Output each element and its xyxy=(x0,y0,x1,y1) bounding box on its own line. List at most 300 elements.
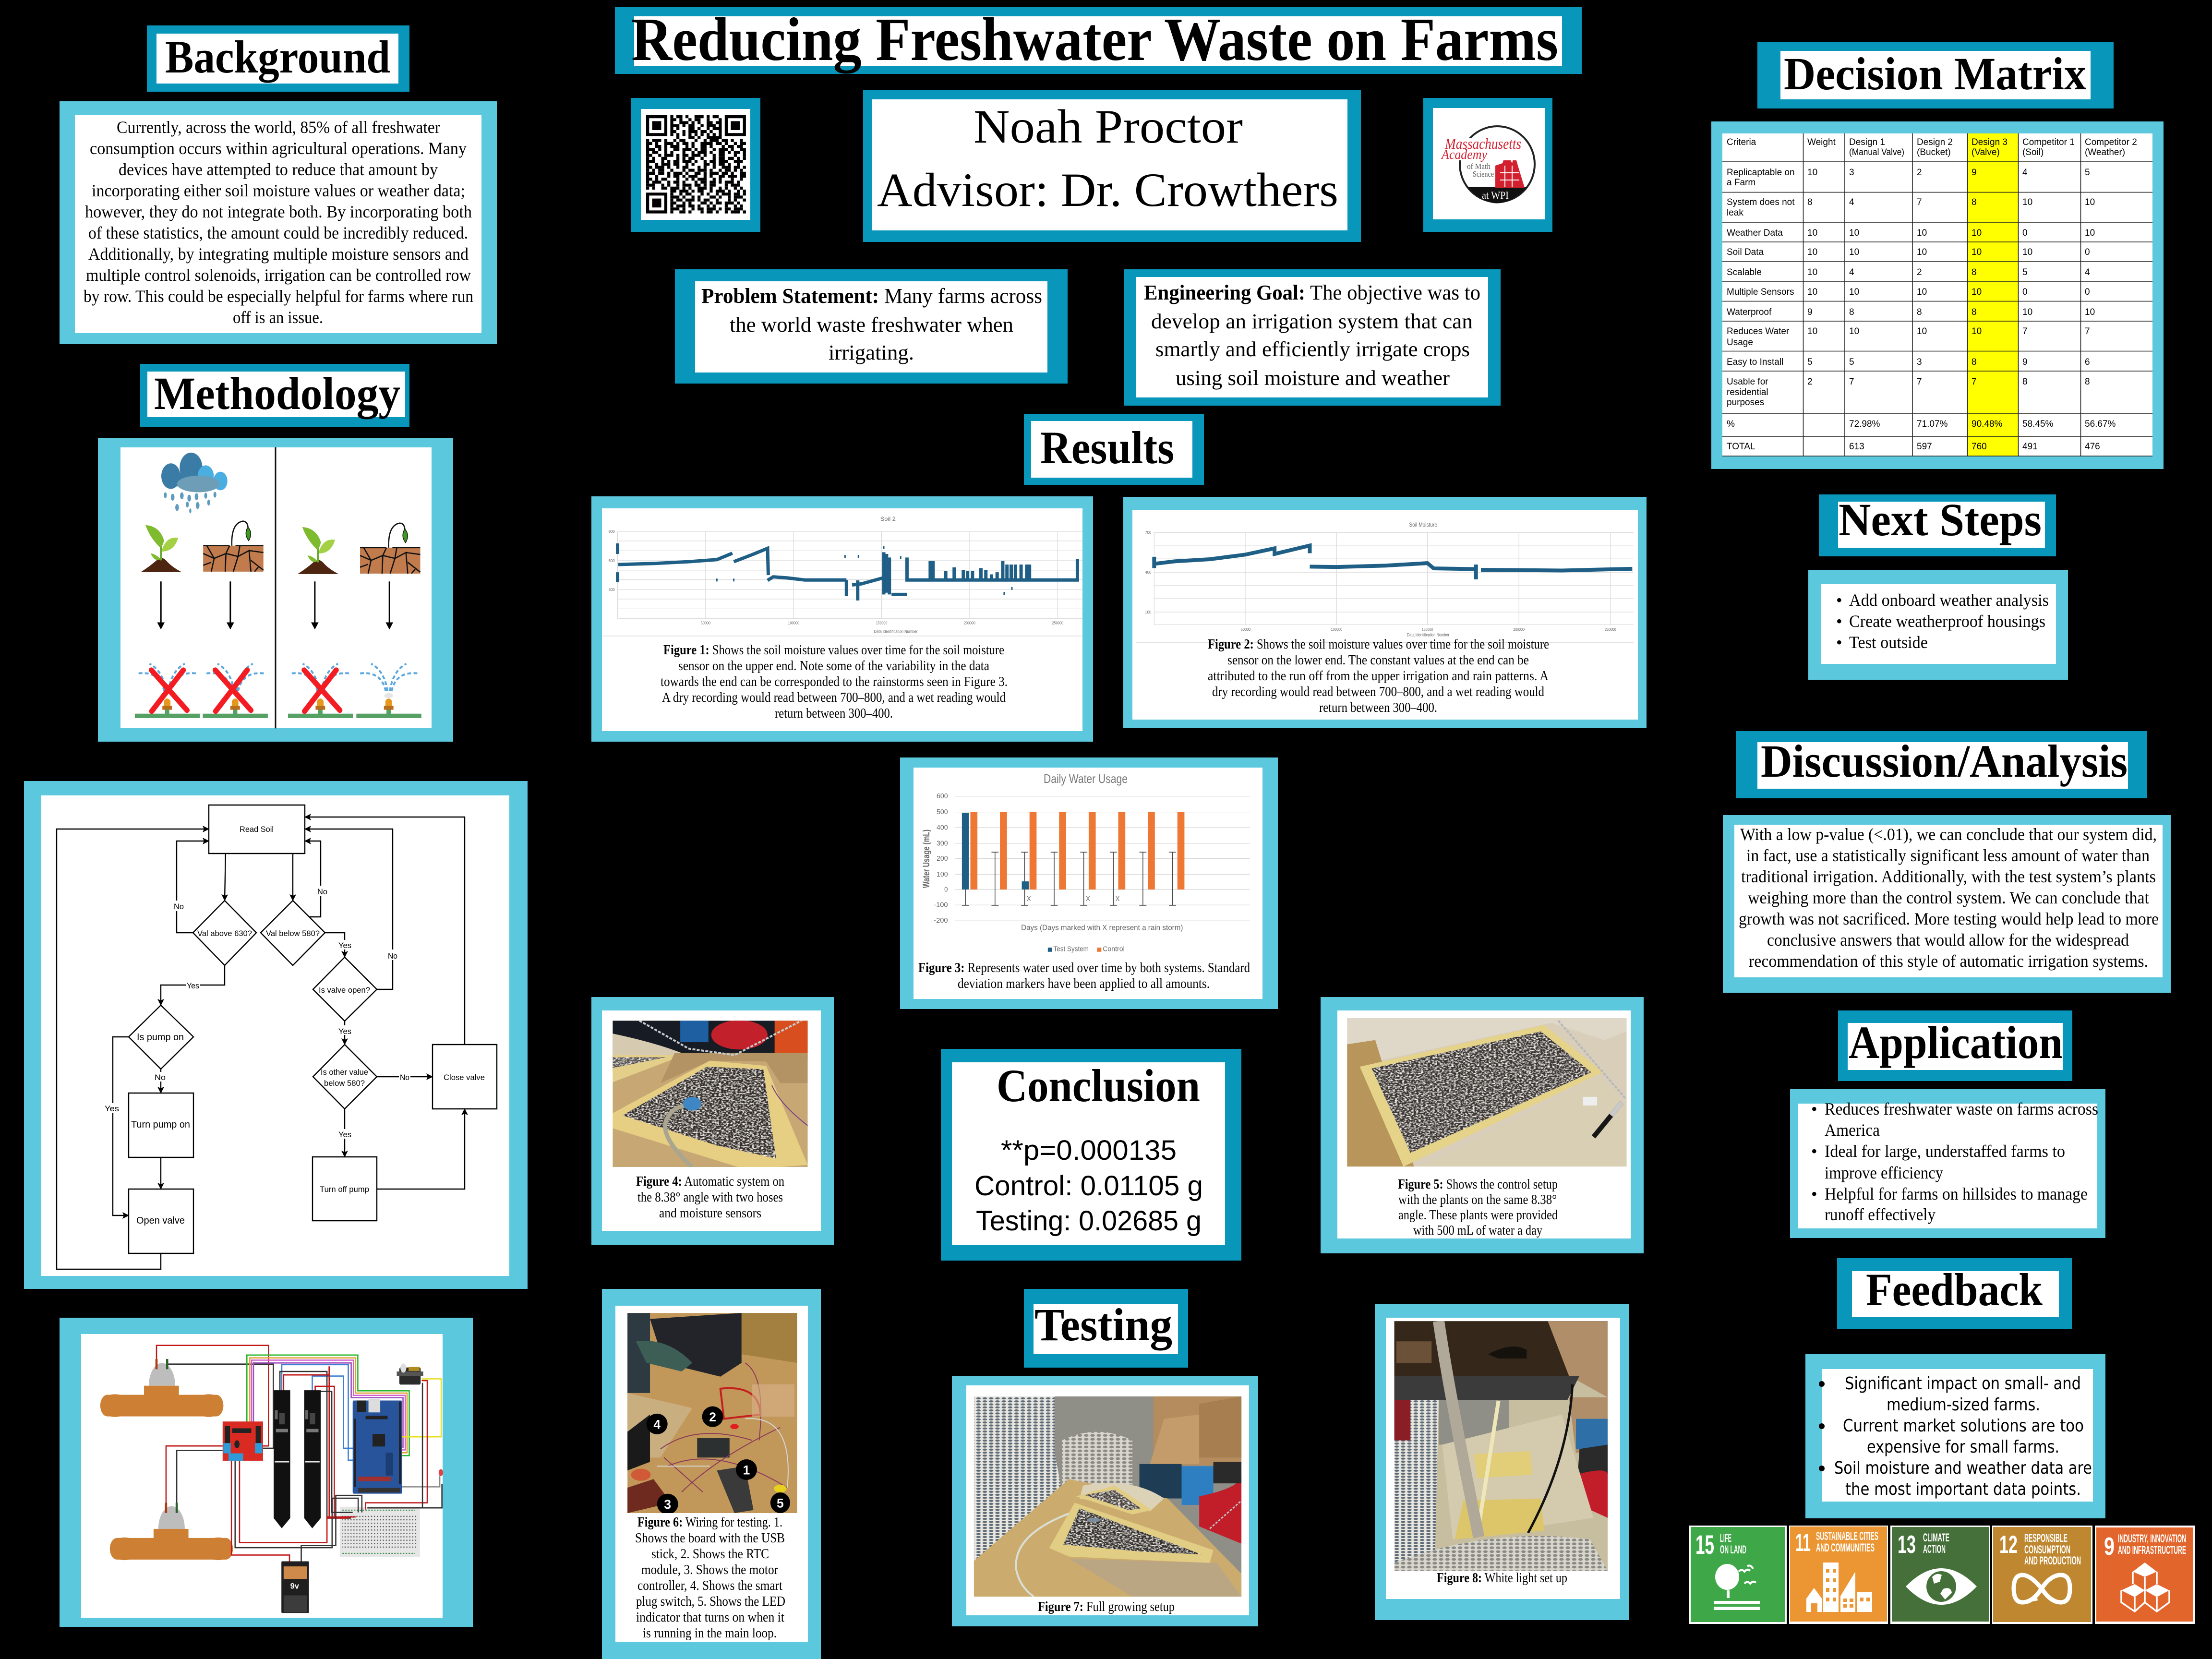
heading: Discussion/Analysis: Discussion/Analysis xyxy=(1761,735,2128,787)
table rows: 9 xyxy=(2022,357,2028,367)
caption: figure 6: Figure 6: Wiring for testing. 1. xyxy=(637,1515,782,1530)
panel: background text: however, they do not integrate both. By incorporating both xyxy=(85,202,472,221)
caption: figure 6: indicator that turns on when it xyxy=(636,1610,784,1625)
panel: conclusion: **p=0.000135 xyxy=(1001,1135,1177,1166)
table header row: (Bucket) xyxy=(1917,147,1951,157)
SDG 15 life on land: 15 xyxy=(1695,1529,1714,1560)
panel: application list: Reduces freshwater waste on farms across xyxy=(1825,1099,2098,1118)
table header row: (Manual Valve) xyxy=(1849,147,1904,157)
panel: figure 3 xyxy=(900,757,1278,1009)
axis labels: 200000 xyxy=(964,621,975,625)
caption: figure 6: controller, 4. Shows the smart xyxy=(637,1578,782,1593)
icons: red crosses xyxy=(151,670,340,711)
chart: daily water usage: Days (Days marked with X represent a rain storm) xyxy=(1021,923,1183,932)
panel: feedback list xyxy=(1805,1354,2105,1518)
caption: figure 6: stick, 2. Shows the RTC xyxy=(651,1547,769,1562)
table rows: 10 xyxy=(1917,228,1927,238)
table rows: 4 xyxy=(1849,267,1854,277)
flowchart text: Yes xyxy=(338,941,351,950)
flowchart text: No xyxy=(155,1073,166,1082)
caption: figure 4: the 8.38° angle with two hoses xyxy=(637,1190,783,1205)
axis labels: Soil 2 xyxy=(880,516,896,522)
heading: Decision Matrix xyxy=(1757,42,2114,108)
engineering goal xyxy=(1124,269,1501,406)
axis labels xyxy=(1145,521,1616,637)
caption: figure 1: sensor on the upper end. Note some of the variability in the data xyxy=(678,659,990,673)
caption: figure 5 xyxy=(1398,1177,1558,1238)
flowchart text: Read Soil xyxy=(240,825,274,834)
panel: feedback list: Soil moisture and weather data are xyxy=(1834,1458,2092,1478)
engineering goal: develop an irrigation system that can xyxy=(1151,310,1473,333)
table rows: 10 xyxy=(2022,247,2032,257)
panel: background text: devices have attempted to reduce that amount by xyxy=(119,160,438,179)
heading: Results: Results xyxy=(1040,422,1174,473)
flowchart text: Turn pump on xyxy=(131,1119,190,1130)
axis labels: 400 xyxy=(1145,570,1151,575)
table rows: 5 xyxy=(1807,357,1813,367)
axis tick labels: -200 xyxy=(934,916,948,924)
chart: soil 2 scatter: 250000 xyxy=(1052,621,1063,625)
axis tick labels: X xyxy=(1027,895,1031,902)
table rows: Reduces Water xyxy=(1727,326,1790,337)
flowchart text: Is valve open? xyxy=(319,986,370,995)
axis tick labels: 0 xyxy=(944,885,948,893)
caption: figure 3 xyxy=(918,961,1250,991)
chart: soil 2 scatter xyxy=(602,516,1082,636)
icon: dry cracked soil, right xyxy=(360,523,421,574)
flowchart text: Is other value xyxy=(321,1068,368,1077)
heading: Decision Matrix: Decision Matrix xyxy=(1784,48,2086,99)
flowchart text: No xyxy=(317,887,327,896)
table rows: 10 xyxy=(1807,228,1817,238)
numbered markers: 1 xyxy=(743,1463,750,1477)
battery xyxy=(281,1561,309,1613)
SDG 13 climate action: 13 xyxy=(1898,1531,1916,1559)
caption: figure 1: A dry recording would read between 700–800, and a wet reading would xyxy=(662,690,1006,705)
table rows: 10 xyxy=(1972,228,1982,238)
table rows: 476 xyxy=(2085,442,2100,452)
school logo: Massachusetts xyxy=(1444,135,1521,152)
table rows: 0 xyxy=(2085,247,2090,257)
panel: application list: • xyxy=(1811,1142,1817,1161)
caption: figure 6: is running in the main loop. xyxy=(643,1626,777,1641)
table rows: 7 xyxy=(1972,377,1977,387)
legend: Test System xyxy=(1054,945,1089,952)
SDG icons row xyxy=(1689,1526,2195,1624)
table rows: a Farm xyxy=(1727,178,1755,188)
chart: soil moisture scatter xyxy=(1136,521,1634,643)
table rows: Scalable xyxy=(1727,267,1762,277)
caption: figure 1: towards the end can be corresponded to the rainstorms seen in Figure 3. xyxy=(661,674,1008,689)
chart: daily water usage: Daily Water Usage xyxy=(1044,771,1128,786)
table rows: 10 xyxy=(2085,197,2095,207)
caption: figure 5: with 500 mL of water a day xyxy=(1413,1223,1542,1238)
LED xyxy=(439,1469,443,1476)
panel: conclusion xyxy=(941,1049,1241,1261)
panel: application list xyxy=(1790,1089,2105,1238)
table header row xyxy=(1727,137,2137,157)
photo: control tray xyxy=(1347,1018,1627,1166)
table rows: Easy to Install xyxy=(1727,357,1783,367)
caption: figure 1: Figure 1: Shows the soil moisture values over time for the soil moisture xyxy=(663,643,1004,658)
table rows: 7 xyxy=(2022,326,2028,337)
axis labels: Data Identification Number xyxy=(874,629,917,634)
numbered markers: 5 xyxy=(777,1496,784,1510)
axis tick labels: X xyxy=(1116,895,1119,902)
SDG 15 life on land xyxy=(1689,1526,1787,1624)
axis labels: 150000 xyxy=(876,621,887,625)
flowchart edge label backgrounds xyxy=(104,886,410,1139)
heading: Background: Background xyxy=(165,31,390,83)
table rows: 10 xyxy=(1807,247,1817,257)
SDG 11 sustainable cities: SUSTAINABLE CITIES xyxy=(1816,1530,1878,1543)
heading: Testing: Testing xyxy=(1034,1299,1172,1350)
SDG 12 responsible consumption: RESPONSIBLE xyxy=(2024,1532,2068,1545)
icons: sprinklers xyxy=(135,664,421,718)
SDG 12 responsible consumption: AND PRODUCTION xyxy=(2024,1554,2081,1567)
chart: daily water usage: Water Usage (mL) xyxy=(922,830,932,888)
axis labels: 600 xyxy=(608,558,615,563)
flowchart text: Val below 580? xyxy=(266,929,320,938)
axis labels: Data Identification Number xyxy=(1407,632,1449,637)
flowchart text: No xyxy=(174,902,184,911)
table rows: 491 xyxy=(2022,442,2038,452)
table rows: 5 xyxy=(1849,357,1854,367)
soil moisture probes xyxy=(274,1390,290,1528)
highlighted column xyxy=(1967,133,2018,456)
SDG 13 climate action: ACTION xyxy=(1923,1543,1946,1556)
engineering goal: using soil moisture and weather xyxy=(1176,366,1450,390)
heading: Application xyxy=(1838,1010,2072,1081)
table rows: 8 xyxy=(1917,307,1922,317)
table rows: 613 xyxy=(1849,442,1864,452)
axis tick labels: 100 xyxy=(937,870,948,878)
axis labels: 150000 xyxy=(1422,627,1433,632)
panel: background text: consumption occurs within agricultural operations. Many xyxy=(90,139,467,158)
table rows: 3 xyxy=(1917,357,1922,367)
arrows down xyxy=(158,581,392,628)
axis tick labels: 500 xyxy=(937,808,948,816)
table rows: 71.07% xyxy=(1917,419,1948,429)
table rows: Soil Data xyxy=(1727,247,1764,257)
table rows: 10 xyxy=(1917,247,1927,257)
table rows: Waterproof xyxy=(1727,307,1772,317)
table rows: 4 xyxy=(1849,197,1854,207)
motor controller xyxy=(223,1421,263,1461)
axis labels: 100000 xyxy=(788,621,799,625)
error bars xyxy=(962,852,1176,905)
axis labels: 700 xyxy=(1145,530,1151,535)
flowchart text xyxy=(105,825,485,1226)
table rows: 10 xyxy=(2022,307,2032,317)
table rows: 760 xyxy=(1972,442,1987,452)
test system bars xyxy=(962,813,1029,890)
table rows: Usable for xyxy=(1727,377,1768,387)
panel: discussion text xyxy=(1723,815,2171,993)
table rows: 10 xyxy=(1849,326,1859,337)
table header row: Competitor 2 xyxy=(2085,137,2137,147)
table rows: leak xyxy=(1727,208,1743,218)
breadboard xyxy=(340,1507,420,1557)
axis tick labels: -100 xyxy=(934,901,948,909)
control bars xyxy=(970,812,1184,890)
table rows: 9 xyxy=(1972,168,1977,178)
flowchart text: Turn off pump xyxy=(320,1185,369,1194)
SDG 11 sustainable cities: AND COMMUNITIES xyxy=(1816,1541,1875,1554)
panel: conclusion: Conclusion xyxy=(997,1060,1200,1111)
heading: Feedback xyxy=(1837,1258,2072,1329)
caption: figure 2: dry recording would read between 700–800, and a wet reading would xyxy=(1212,685,1544,699)
author block: Advisor: Dr. Crowthers xyxy=(877,163,1338,216)
author block xyxy=(863,90,1361,242)
table rows: 0 xyxy=(2022,287,2028,297)
panel: next steps list: Add onboard weather analysis xyxy=(1849,590,2049,610)
table rows: 597 xyxy=(1917,442,1932,452)
caption: figure 3: deviation markers have been applied to all amounts. xyxy=(958,976,1210,991)
SDG 9 industry and innovation: 9 xyxy=(2104,1533,2115,1561)
wires xyxy=(156,1346,442,1561)
panel: figure 6 xyxy=(602,1289,821,1659)
flowchart text: Yes xyxy=(187,981,199,990)
panel: background text: Currently, across the world, 85% of all freshwater xyxy=(117,118,440,137)
table header row: (Weather) xyxy=(2085,147,2125,157)
caption: figure 1 xyxy=(661,643,1008,721)
axis tick labels: 300 xyxy=(937,839,948,847)
SDG 11 sustainable cities xyxy=(1789,1526,1888,1624)
panel: application list: • xyxy=(1811,1184,1817,1203)
table rows: 4 xyxy=(2085,267,2090,277)
panel: next steps list xyxy=(1808,570,2068,680)
caption: figure 4: and moisture sensors xyxy=(659,1206,761,1221)
icon: healthy plant (rain side) xyxy=(141,525,182,572)
heading: Results xyxy=(1024,414,1204,485)
panel: application list: improve efficiency xyxy=(1825,1163,1943,1182)
problem statement xyxy=(675,269,1068,384)
table header row: (Valve) xyxy=(1972,147,2000,157)
table rows: 10 xyxy=(1807,287,1817,297)
caption: figure 6: module, 3. Shows the motor xyxy=(641,1563,779,1577)
engineering goal: Engineering Goal: The objective was to xyxy=(1144,281,1480,304)
panel: conclusion: Testing: 0.02685 g xyxy=(976,1205,1202,1237)
table rows: % xyxy=(1727,419,1735,429)
SDG 12 responsible consumption: CONSUMPTION xyxy=(2024,1543,2070,1556)
table rows: 8 xyxy=(1972,307,1977,317)
table rows: Multiple Sensors xyxy=(1727,287,1794,297)
title: Reducing Freshwater Waste on Farms xyxy=(631,5,1558,73)
axis labels: 300 xyxy=(608,587,615,592)
chart: daily water usage xyxy=(922,771,1250,952)
panel: figure 1 xyxy=(591,496,1093,742)
caption: figure 2: return between 300–400. xyxy=(1319,700,1437,715)
table rows: 10 xyxy=(1972,287,1982,297)
photo: wiring for testing xyxy=(627,1313,797,1515)
panel: discussion text: recommendation of this style of automatic irrigation systems. xyxy=(1749,951,2148,971)
panel: application list: • xyxy=(1811,1099,1817,1118)
numbered markers xyxy=(647,1407,790,1515)
flowchart text: Close valve xyxy=(444,1073,485,1082)
flowchart text: Open valve xyxy=(136,1215,185,1226)
table rows: 3 xyxy=(1849,168,1854,178)
table rows: Replicaptable on xyxy=(1727,168,1795,178)
caption: figure 2: attributed to the run off from the upper irrigation and rain patterns. A xyxy=(1208,669,1549,684)
panel: methodology diagram xyxy=(98,438,453,742)
flowchart text: No xyxy=(400,1073,409,1082)
panel: discussion text: conclusive answers that would allow for the widespread xyxy=(1767,930,2129,950)
school logo: Academy xyxy=(1441,147,1488,162)
wire terminals xyxy=(156,1359,178,1513)
icon: healthy plant xyxy=(298,527,339,574)
caption: figure 6 xyxy=(635,1515,785,1641)
caption: figure 4: Figure 4: Automatic system on xyxy=(636,1174,784,1189)
SDG 13 climate action xyxy=(1890,1526,1990,1624)
panel: application list: Helpful for farms on hillsides to manage xyxy=(1825,1184,2088,1203)
engineering goal: smartly and efficiently irrigate crops xyxy=(1155,337,1470,361)
table rows: 2 xyxy=(1807,377,1813,387)
problem statement: the world waste freshwater when xyxy=(730,313,1013,337)
table rows: 10 xyxy=(1917,287,1927,297)
numbered markers: 4 xyxy=(653,1417,661,1431)
icon: dry cracked soil xyxy=(203,521,264,572)
table rows xyxy=(1727,168,2116,452)
heading: Application: Application xyxy=(1849,1017,2063,1068)
flowchart text: Val above 630? xyxy=(197,929,252,938)
flowchart text: No xyxy=(388,951,397,961)
caption: figure 1: return between 300–400. xyxy=(775,706,893,721)
arduino board xyxy=(353,1399,402,1494)
panel: feedback list: Significant impact on small- and xyxy=(1845,1374,2081,1394)
axis labels: 50000 xyxy=(1241,627,1250,632)
table rows: 8 xyxy=(1972,197,1977,207)
table header row: Design 3 xyxy=(1972,137,2008,147)
panel: application list: Ideal for large, understaffed farms to xyxy=(1825,1142,2065,1161)
panel: background text: of these statistics, the amount could be incredibly reduced. xyxy=(88,223,468,242)
caption: figure 5: with the plants on the same 8.38° xyxy=(1398,1192,1557,1207)
axis labels: 100000 xyxy=(1331,627,1342,632)
table rows: 7 xyxy=(1849,377,1854,387)
photo: white light setup xyxy=(1393,1321,1608,1571)
table rows: 10 xyxy=(1807,168,1817,178)
table header row: (Soil) xyxy=(2022,147,2044,157)
flowchart text: below 580? xyxy=(324,1079,365,1088)
SDG 11 sustainable cities: 11 xyxy=(1795,1529,1811,1557)
pumps xyxy=(100,1363,233,1560)
panel: background text: off is an issue. xyxy=(233,308,323,327)
caption: figure 2: sensor on the lower end. The constant values at the end can be xyxy=(1227,653,1529,668)
panel: figure 4 xyxy=(591,997,834,1245)
panel: background text: by row. This could be especially helpful for farms where run xyxy=(84,287,473,306)
school logo: Science xyxy=(1473,169,1494,179)
table rows: 7 xyxy=(1917,377,1922,387)
caption: figure 7: Figure 7: Full growing setup xyxy=(1038,1599,1175,1614)
panel: feedback list: expensive for small farms. xyxy=(1867,1437,2059,1457)
flowchart text: Yes xyxy=(338,1027,351,1036)
axis labels xyxy=(608,516,1063,634)
panel: flowchart xyxy=(24,781,528,1289)
table header row: Criteria xyxy=(1727,137,1756,147)
table rows: 10 xyxy=(1917,326,1927,337)
table rows: 10 xyxy=(1807,267,1817,277)
school logo: at WPI xyxy=(1482,189,1509,201)
table rows: 10 xyxy=(1972,247,1982,257)
panel: figure 2 xyxy=(1123,497,1647,728)
table rows: 2 xyxy=(1917,168,1922,178)
table rows: 72.98% xyxy=(1849,419,1880,429)
servo xyxy=(397,1364,423,1384)
table rows: 0 xyxy=(2022,228,2028,238)
axis tick labels: X xyxy=(1086,895,1090,902)
caption: figure 4 xyxy=(636,1174,784,1221)
table rows: 10 xyxy=(1807,326,1817,337)
SDG 12 responsible consumption: 12 xyxy=(1999,1531,2018,1559)
panel: figure 5 xyxy=(1321,997,1644,1253)
panel: wiring diagram xyxy=(60,1318,473,1627)
table rows: 10 xyxy=(1849,228,1859,238)
caption: figure 3: Figure 3: Represents water used over time by both systems. Standard xyxy=(918,961,1250,975)
axis tick labels: 600 xyxy=(937,792,948,800)
table rows: Weather Data xyxy=(1727,228,1783,238)
flowchart text: Yes xyxy=(338,1130,351,1139)
table rows: 10 xyxy=(2022,197,2032,207)
panel: feedback list: Current market solutions are too xyxy=(1843,1416,2084,1436)
heading: Feedback: Feedback xyxy=(1866,1264,2043,1315)
table rows: System does not xyxy=(1727,197,1795,207)
axis labels: Soil Moisture xyxy=(1409,521,1437,528)
table rows: 5 xyxy=(2022,267,2028,277)
table rows: 9 xyxy=(1807,307,1813,317)
flowchart text: Yes xyxy=(105,1104,119,1113)
axis tick labels xyxy=(934,792,1183,932)
battery: 9v xyxy=(290,1581,299,1590)
table rows: Usage xyxy=(1727,337,1753,348)
panel: next steps list: Test outside xyxy=(1849,633,1928,652)
photo: full growing setup xyxy=(974,1396,1241,1597)
panel: next steps list: Create weatherproof housings xyxy=(1849,612,2045,631)
panel: application list: America xyxy=(1825,1120,1880,1140)
table header row: Competitor 1 xyxy=(2022,137,2075,147)
table header row: Weight xyxy=(1807,137,1836,147)
table rows: 5 xyxy=(2085,168,2090,178)
panel: background text: multiple control solenoids, irrigation can be controlled row xyxy=(86,265,471,285)
QR code xyxy=(631,98,760,232)
flowchart text: Is pump on xyxy=(137,1032,184,1043)
problem statement: irrigating. xyxy=(829,341,914,364)
caption: figure 6: Shows the board with the USB xyxy=(635,1531,785,1546)
table rows: 10 xyxy=(1849,247,1859,257)
panel: feedback list: the most important data points. xyxy=(1845,1479,2081,1499)
problem statement: Problem Statement: Many farms across xyxy=(701,284,1042,308)
axis labels: 100 xyxy=(1145,610,1151,614)
panel: conclusion: Control: 0.01105 g xyxy=(974,1170,1203,1202)
panel: discussion text: growth was not sacrificed. More testing would help lead to more xyxy=(1739,909,2159,928)
panel: next steps list: • xyxy=(1836,590,1842,610)
caption: figure 5: angle. These plants were provided xyxy=(1398,1208,1558,1223)
caption: figure 6: plug switch, 5. Shows the LED xyxy=(636,1594,785,1609)
heading: Next Steps: Next Steps xyxy=(1839,494,2042,545)
panel: figure 7 xyxy=(952,1376,1258,1626)
axis labels: 200000 xyxy=(1513,627,1525,632)
panel: feedback list: medium-sized farms. xyxy=(1887,1395,2040,1415)
axis labels: 50000 xyxy=(701,621,710,625)
caption: figure 8: Figure 8: White light set up xyxy=(1437,1571,1567,1586)
table rows: 8 xyxy=(1972,267,1977,277)
table rows: 6 xyxy=(2085,357,2090,367)
numbered markers: 3 xyxy=(664,1497,671,1512)
table rows: TOTAL xyxy=(1727,442,1755,452)
table rows: 10 xyxy=(1972,326,1982,337)
table rows: 56.67% xyxy=(2085,419,2116,429)
panel: background text: Additionally, by integrating multiple moisture sensors and xyxy=(88,244,469,264)
panel: next steps list: • xyxy=(1836,612,1842,631)
